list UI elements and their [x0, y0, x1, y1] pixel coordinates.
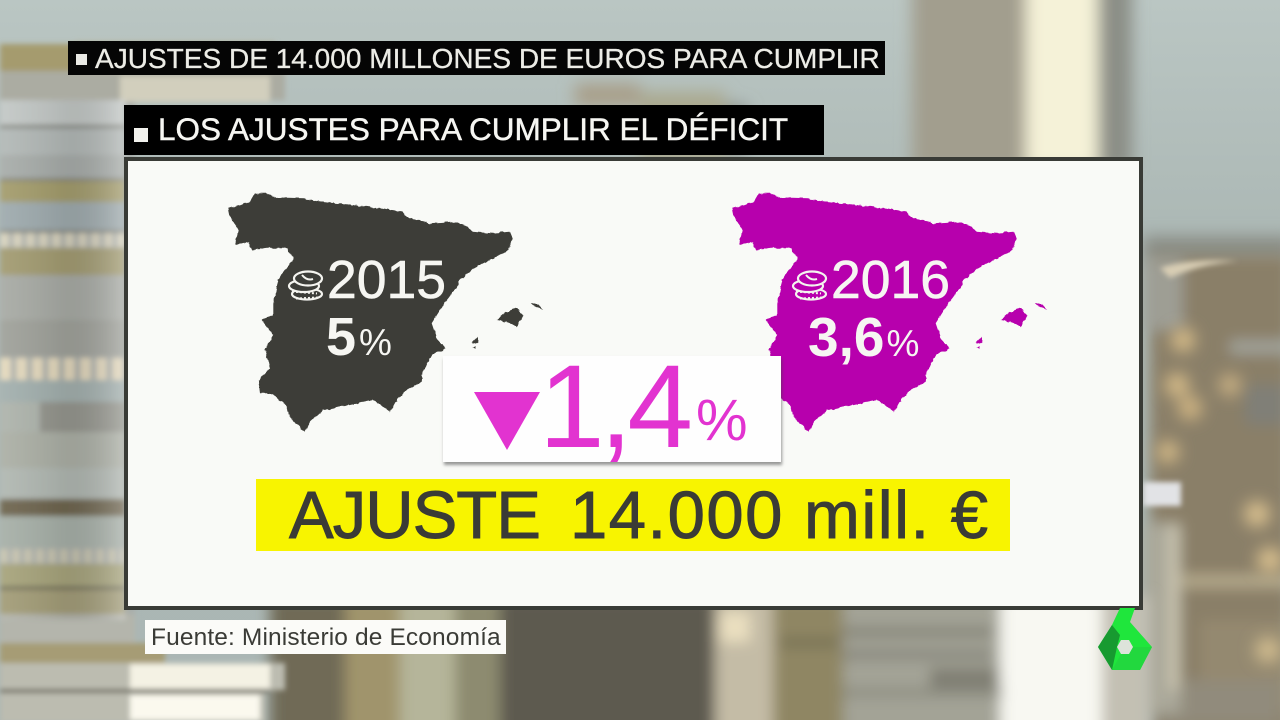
source note: Fuente: Ministerio de Economía: [151, 624, 501, 651]
icon: down triangle: [474, 392, 540, 450]
map of Spain 2016: [732, 193, 1047, 432]
label: 2016: [792, 251, 950, 368]
highlight: ajuste 14.000 mill. €: [256, 479, 1010, 551]
right stack: [1143, 255, 1280, 720]
icon: coins: [792, 270, 828, 301]
value 3,6%: 3,6%: [808, 306, 919, 368]
Balearic islands 2016: [976, 304, 1047, 349]
icon: laSexta logo: [1098, 608, 1152, 670]
headline text: AJUSTES DE 14.000 MILLONES DE EUROS PARA CUMPLIR: [95, 43, 880, 74]
bottom coins: [270, 596, 1150, 720]
left stack: [0, 42, 285, 720]
icon: headline bullet: [76, 54, 87, 65]
text: ajuste: AJUSTE: [289, 478, 540, 553]
text: amount: 14.000 mill. €: [570, 478, 990, 553]
panel heading text: LOS AJUSTES PARA CUMPLIR EL DÉFICIT: [158, 111, 788, 147]
far columns: [575, 0, 1280, 262]
value 1,4: 1,4: [539, 341, 688, 473]
map panel: 2015: [228, 192, 544, 432]
icon: heading bullet: [134, 128, 148, 142]
value 5%: 5%: [326, 307, 392, 367]
map panel: 2016: [732, 192, 1048, 432]
callout: 1,4% reduction: [443, 356, 781, 462]
icon: coins: [288, 270, 324, 301]
main panel: [124, 157, 1143, 610]
panel heading bar: los ajustes: [124, 105, 824, 155]
headline bar: ajustes de 14.000 millones: [68, 41, 885, 75]
year 2015: 2015: [327, 251, 446, 310]
map of Spain 2015: [228, 193, 543, 432]
Balearic islands 2015: [472, 304, 543, 349]
year 2016: 2016: [831, 251, 950, 310]
label: 2015: [288, 251, 446, 367]
percent sign: %: [696, 388, 748, 453]
